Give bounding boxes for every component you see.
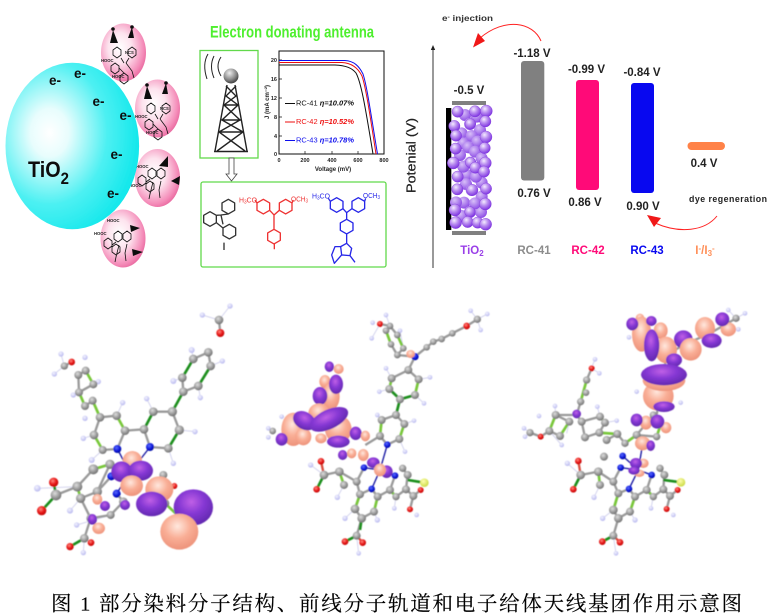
energy level: I-/I3-: /I xyxy=(701,245,708,257)
label: e- injection: e xyxy=(442,13,447,23)
energy level: RC-42: RC-42 xyxy=(571,245,605,257)
icon: dye-loaded sphere 2: HOOC xyxy=(146,130,159,135)
y axis numbers: 12 xyxy=(271,96,277,102)
axis label: Voltage: Voltage (mV) xyxy=(315,167,351,173)
energy level: I-/I3-: 0.4 V xyxy=(691,158,718,170)
energy level: TiO2: 2 xyxy=(479,249,484,258)
y axis numbers: 0 xyxy=(274,152,277,158)
atoms xyxy=(34,303,233,555)
label: OCH3 blue: 3 xyxy=(378,195,380,201)
energy level: RC-43: -0.84 V xyxy=(623,67,661,79)
bonds xyxy=(524,310,745,553)
icon: dye-loaded sphere 1 xyxy=(101,24,146,84)
electrons xyxy=(49,66,132,201)
x axis numbers xyxy=(277,158,389,164)
label: H3CO red: H xyxy=(239,196,244,204)
icon: dye-loaded sphere 4: HOOC xyxy=(94,231,107,236)
legend: RC-42: RC-42 η=10.52% xyxy=(296,117,354,126)
icon: dye-loaded sphere 2: NCS xyxy=(160,106,169,111)
atoms xyxy=(266,308,490,556)
caption: 图 1 部分染料分子结构、前线分子轨道和电子给体天线基团作用示意图 xyxy=(51,592,742,616)
icon: dye-loaded sphere 3 xyxy=(129,149,180,207)
label: e- injection: injection xyxy=(450,13,493,23)
panel: TiO2 nanoparticle with dyes xyxy=(6,24,180,268)
panel: donor group structures xyxy=(201,182,386,267)
TiO2 particles xyxy=(447,105,492,230)
icon: dye-loaded sphere 4: HOOC xyxy=(107,218,120,223)
electrons: e- xyxy=(74,66,86,81)
energy level: RC-42: -0.99 V xyxy=(568,64,605,76)
axis ticks xyxy=(279,60,358,154)
label: TiO2: 2 xyxy=(61,169,69,188)
axis label: J: J (mA cm⁻²) xyxy=(264,85,271,119)
axis label: Potenial (V): Potenial (V) xyxy=(404,118,418,193)
label: OCH3 blue: OCH xyxy=(363,191,379,200)
energy level: RC-43: RC-43 xyxy=(630,245,664,257)
bonds xyxy=(37,306,230,553)
arrow: dye regeneration xyxy=(647,215,717,230)
energy level: TiO2 xyxy=(446,85,492,258)
electrons: e- xyxy=(119,108,132,123)
label: OCH3 red: 3 xyxy=(306,198,308,204)
orbital lobes xyxy=(572,312,736,477)
structure: triarylamine (red) xyxy=(255,199,293,249)
electrons: e- xyxy=(107,186,119,201)
energy level: TiO2: -0.5 V xyxy=(454,85,485,97)
x axis numbers: 800 xyxy=(379,158,389,164)
label: dye regeneration: dye regeneration xyxy=(689,194,767,204)
energy level: I-/I3-: - xyxy=(712,244,715,253)
icon: dye-loaded sphere 3: HOOC xyxy=(136,164,149,169)
bonds xyxy=(311,311,487,553)
energy level: RC-43 xyxy=(623,67,664,257)
icon: radio waves xyxy=(205,54,221,79)
energy level: RC-42: 0.86 V xyxy=(568,197,602,209)
energy level: I-/I3-: I xyxy=(695,245,699,257)
structure: triarylamine with EDOT (blue) xyxy=(328,198,366,263)
energy level: TiO2: TiO xyxy=(460,245,479,257)
orbital lobes xyxy=(276,350,415,478)
energy level: RC-41: RC-41 xyxy=(517,245,551,257)
orbital lobes xyxy=(88,451,213,550)
x axis numbers: 600 xyxy=(353,158,363,164)
curve: RC-43 xyxy=(279,60,378,154)
label: H3CO blue: H xyxy=(312,192,317,200)
electrons: e- xyxy=(49,73,61,88)
arrow: electron injection xyxy=(473,24,541,48)
label: TiO2: TiO xyxy=(28,157,65,182)
atoms xyxy=(522,308,747,556)
icon: dye-loaded sphere 2: HOOC xyxy=(135,114,148,119)
y axis numbers: 16 xyxy=(271,77,277,83)
axis: potential xyxy=(431,45,435,268)
energy level: RC-43: 0.90 V xyxy=(626,201,660,213)
energy level: RC-41 xyxy=(513,48,551,257)
icon: dye-loaded sphere 4 xyxy=(94,210,146,268)
legend: RC-43: RC-43 η=10.78% xyxy=(296,136,354,144)
electrons: e- xyxy=(110,147,123,162)
label: e- injection: - xyxy=(447,15,450,21)
energy level: RC-41: 0.76 V xyxy=(517,188,551,200)
energy level: I-/I3- xyxy=(688,142,725,258)
x axis numbers: 200 xyxy=(300,158,310,164)
label: H3CO red: CO xyxy=(247,196,257,204)
electrons: e- xyxy=(92,94,105,109)
icon: dye-loaded sphere 1: HOOC xyxy=(112,74,125,79)
chart: J-V curves xyxy=(264,51,389,173)
energy level: I-/I3-: - xyxy=(699,244,702,253)
icon: dye-loaded sphere 2 xyxy=(135,80,180,140)
structure: carbazole (black) xyxy=(204,199,236,250)
icon: tower xyxy=(214,85,248,152)
heading: Electron donating antenna: Electron donating antenna xyxy=(210,22,374,42)
energy level: RC-41: -1.18 V xyxy=(513,48,551,60)
x axis numbers: 0 xyxy=(277,158,281,164)
panel: antenna tower xyxy=(200,50,258,158)
panel: molecular orbital 2 xyxy=(266,308,490,556)
label: H3CO blue: CO xyxy=(320,192,330,200)
curve: RC-42 xyxy=(279,62,376,154)
icon: TiO2 sphere xyxy=(6,63,139,229)
icon: dye-loaded sphere 1: HOOC xyxy=(101,58,114,63)
energy level: I-/I3-: 3 xyxy=(708,249,713,258)
icon: dye-loaded sphere 1: NCS xyxy=(125,50,134,55)
icon: dye-loaded sphere 3: HOOC xyxy=(129,183,142,188)
panel: molecular orbital 1 xyxy=(34,303,233,555)
y axis numbers: 4 xyxy=(274,134,278,140)
y axis numbers xyxy=(271,58,278,158)
label: H3CO blue: 3 xyxy=(317,196,320,202)
y axis numbers: 8 xyxy=(274,115,277,121)
curve: RC-41 xyxy=(279,65,373,154)
label: H3CO red: 3 xyxy=(244,200,247,206)
x axis numbers: 400 xyxy=(327,158,337,164)
energy level: RC-42 xyxy=(568,64,605,257)
legend: RC-41: RC-41 η=10.07% xyxy=(296,98,354,108)
label: OCH3 red: OCH xyxy=(291,194,307,204)
y axis numbers: 20 xyxy=(271,58,277,64)
panel: molecular orbital 3 xyxy=(522,308,747,556)
arrow: hollow down arrow xyxy=(226,158,237,181)
